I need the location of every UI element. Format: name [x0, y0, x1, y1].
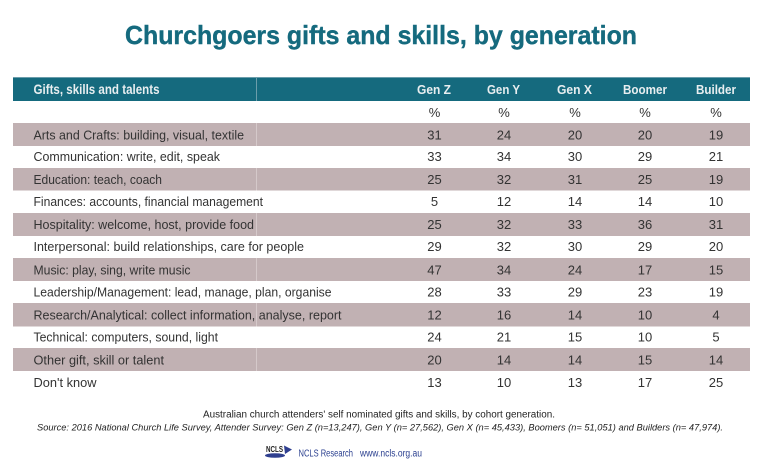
title: Churchgoers gifts and skills, by generation: [125, 20, 637, 50]
row: research: Research/Analytical: collect information, analyse, report: [34, 308, 342, 322]
percent unit row: %: [498, 105, 510, 120]
row: hospitality: 33: [568, 217, 582, 232]
row: leadership: [34, 284, 723, 300]
row: interpersonal: [34, 239, 723, 254]
row: other: 14: [709, 352, 723, 368]
row: communication: 34: [497, 149, 511, 164]
row: interpersonal: 29: [427, 239, 442, 254]
row: leadership: 29: [568, 284, 582, 300]
row: finances: 10: [709, 194, 723, 209]
row: hospitality: 25: [427, 217, 442, 232]
row: research: 16: [497, 308, 511, 322]
row: finances: 5: [431, 194, 438, 209]
row: other: 15: [638, 352, 652, 368]
row: don't know: 17: [638, 375, 652, 390]
row: education: 31: [568, 172, 582, 187]
footer: NCLS Research and website: NCLS Research: [298, 448, 353, 460]
row: don't know: 13: [568, 375, 582, 390]
table header row: Gen X: [557, 82, 592, 97]
row: music: 34: [497, 262, 511, 278]
row: interpersonal: 32: [497, 239, 511, 254]
row: research: [13, 303, 750, 326]
row: leadership: 23: [638, 284, 652, 300]
row: interpersonal: Interpersonal: build relationships, care for people: [34, 239, 304, 254]
percent unit row: %: [569, 105, 581, 120]
icon: NCLS logo: NCLS: [266, 444, 283, 454]
row: arts and crafts: 24: [497, 128, 511, 142]
row: communication: 29: [638, 149, 652, 164]
row: communication: 30: [568, 149, 582, 164]
percent unit row: %: [429, 105, 441, 120]
row: interpersonal: 29: [638, 239, 652, 254]
icon: NCLS logo: [265, 444, 292, 458]
row: music: 15: [709, 262, 723, 278]
row: technical: 24: [427, 330, 442, 344]
table header row: Gen Y: [487, 82, 520, 97]
percent unit row: [429, 105, 722, 120]
row: arts and crafts: 20: [638, 128, 652, 142]
row: education: 25: [638, 172, 652, 187]
footer: NCLS Research and website: [298, 448, 422, 460]
table: [13, 77, 750, 390]
row: arts and crafts: 19: [709, 128, 723, 142]
row: leadership: 33: [497, 284, 511, 300]
row: education: 32: [497, 172, 511, 187]
percent unit row: %: [710, 105, 722, 120]
row: interpersonal: 20: [709, 239, 723, 254]
caption: Australian church attenders' self nominated gifts and skills, by cohort generation.: [203, 410, 555, 420]
row: finances: Finances: accounts, financial management: [34, 194, 263, 209]
row: communication: 21: [709, 149, 723, 164]
row: arts and crafts: Arts and Crafts: building, visual, textile: [34, 128, 244, 142]
row: education: [13, 168, 750, 190]
row: research: 10: [638, 308, 652, 322]
row: hospitality: [13, 213, 750, 236]
row: technical: 21: [497, 330, 511, 344]
row: technical: 15: [568, 330, 582, 344]
row: hospitality: 31: [709, 217, 723, 232]
row: technical: Technical: computers, sound, light: [34, 330, 218, 344]
row: music: Music: play, sing, write music: [34, 262, 191, 278]
row: research: 4: [712, 308, 720, 322]
row: interpersonal: 30: [568, 239, 582, 254]
row: technical: 5: [712, 330, 720, 344]
row: education: Education: teach, coach: [34, 172, 162, 187]
row: don't know: 13: [427, 375, 442, 390]
row: don't know: [34, 375, 723, 390]
row: don't know: 25: [709, 375, 723, 390]
row: technical: [34, 330, 720, 344]
row: leadership: 28: [427, 284, 442, 300]
row: finances: 12: [497, 194, 511, 209]
table header row: [13, 77, 750, 101]
row: research: 14: [568, 308, 582, 322]
row: finances: [34, 194, 723, 209]
row: other: 14: [568, 352, 582, 368]
row: don't know: 10: [497, 375, 511, 390]
row: other: Other gift, skill or talent: [34, 352, 164, 368]
row: hospitality: 36: [638, 217, 652, 232]
row: education: 19: [709, 172, 723, 187]
row: don't know: Don't know: [34, 375, 97, 390]
row: finances: 14: [568, 194, 582, 209]
footer: NCLS Research and website: www.ncls.org.au: [359, 448, 422, 460]
table header row: Gifts, skills and talents: [34, 82, 160, 97]
row: education: 25: [427, 172, 442, 187]
row: other: 20: [427, 352, 442, 368]
row: communication: 33: [427, 149, 442, 164]
row: hospitality: Hospitality: welcome, host, provide food: [34, 217, 254, 232]
row: other: [13, 348, 750, 371]
row: music: 17: [638, 262, 652, 278]
row: other: 14: [497, 352, 511, 368]
row: arts and crafts: 31: [427, 128, 442, 142]
row: arts and crafts: [13, 123, 750, 146]
row: communication: Communication: write, edit, speak: [34, 149, 220, 164]
percent unit row: %: [639, 105, 651, 120]
row: leadership: 19: [709, 284, 723, 300]
row: music: 24: [568, 262, 582, 278]
row: leadership: Leadership/Management: lead, manage, plan, organise: [34, 284, 332, 300]
row: music: 47: [427, 262, 442, 278]
row: communication: [34, 149, 723, 164]
row: arts and crafts: 20: [568, 128, 582, 142]
row: technical: 10: [638, 330, 652, 344]
row: research: 12: [427, 308, 442, 322]
source note: Source: 2016 National Church Life Survey, Attender Survey: Gen Z (n=13,247), Gen Y (n= 27,562), Gen X (n= 45,433), Boomers (n= 51,051) and Builders (n= 47,974).: [37, 422, 723, 434]
row: music: [13, 258, 750, 281]
table header row: Boomer: [623, 82, 667, 97]
row: finances: 14: [638, 194, 652, 209]
row: hospitality: 32: [497, 217, 511, 232]
table header row: Gen Z: [417, 82, 451, 97]
table header row: Builder: [696, 82, 736, 97]
